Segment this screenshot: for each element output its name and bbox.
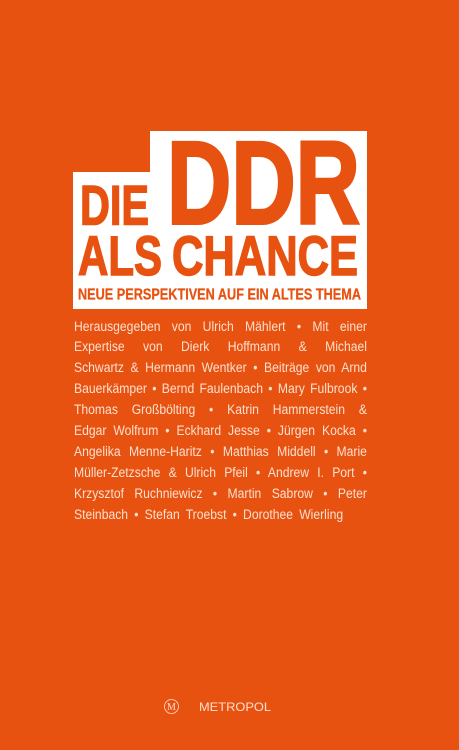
contributors text block: Angelika Menne-Haritz • Matthias Middell • Marie — [74, 444, 367, 459]
contributors text block: Expertise von Dierk Hoffmann & Michael — [74, 339, 367, 354]
contributors text block: Edgar Wolfrum • Eckhard Jesse • Jürgen Kocka • — [74, 423, 367, 438]
icon: M roundel: M — [167, 702, 176, 713]
white stepped title panel — [73, 131, 367, 309]
contributors text block: Krzysztof Ruchniewicz • Martin Sabrow • Peter — [74, 486, 367, 501]
contributors text block: Müller-Zetzsche & Ulrich Pfeil • Andrew I. Port • — [74, 465, 367, 480]
contributors text block: Steinbach • Stefan Troebst • Dorothee Wierling — [74, 507, 343, 522]
title: ALS CHANCE: CHANCE — [172, 224, 358, 287]
publisher name: METROPOL — [199, 702, 272, 714]
subtitle: NEUE PERSPEKTIVEN AUF EIN ALTES THEMA — [78, 286, 361, 304]
icon: M roundel — [164, 700, 178, 714]
contributors text block: Herausgegeben von Ulrich Mählert • Mit einer — [74, 318, 367, 334]
title: ALS CHANCE — [78, 224, 358, 287]
contributors text block: Thomas Großbölting • Katrin Hammerstein & — [74, 402, 367, 417]
title: DIE: DIE — [80, 174, 149, 236]
contributors text block — [74, 318, 367, 522]
title: DDR: DDR — [167, 118, 360, 250]
contributors text block: Bauerkämper • Bernd Faulenbach • Mary Fulbrook • — [74, 381, 367, 396]
contributors text block: Schwartz & Hermann Wentker • Beiträge von Arnd — [74, 360, 367, 375]
title: ALS CHANCE: ALS — [78, 224, 162, 287]
